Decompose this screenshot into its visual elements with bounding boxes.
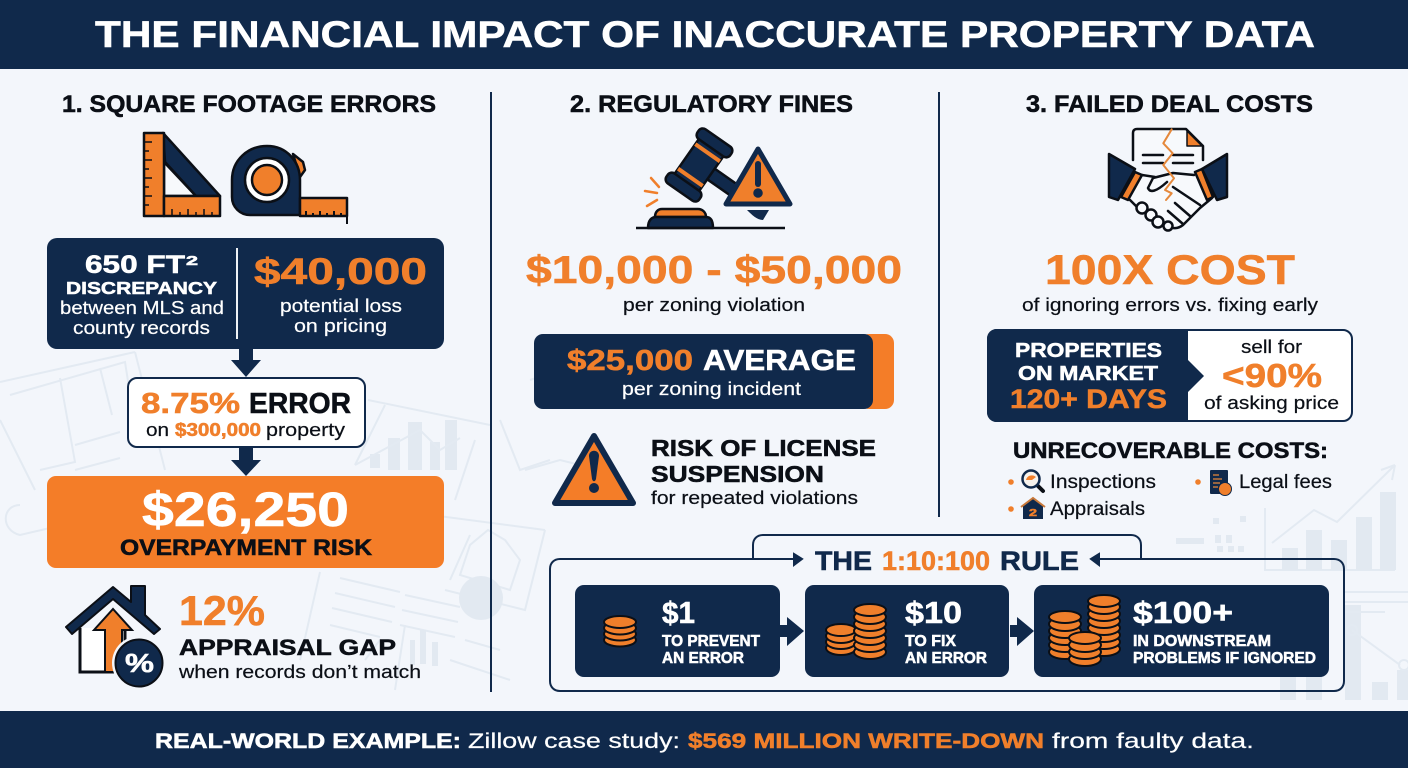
card: $100+ [1034,585,1329,677]
icon: coin stacks large [1049,595,1120,666]
stat: 100x cost [1022,246,1318,315]
stat: 100x cost: 100X COST [1045,246,1295,293]
callout: average fine: $25,000 [567,345,693,377]
heading: the 1:10:100 rule: THE [815,546,872,576]
text: license suspension risk [651,435,876,508]
list: unrecoverable costs: UNRECOVERABLE COSTS: [1013,438,1328,463]
icon: gavel and warning [636,126,790,228]
card: $1: AN ERROR [662,650,744,667]
card: $10 [805,585,1009,677]
panel: square footage errors [47,91,444,690]
callout: overpayment risk: $26,250 [142,484,349,537]
heading: the 1:10:100 rule: 1:10:100 [882,546,990,576]
callout: days on market: PROPERTIES [1015,340,1162,362]
card: $10: AN ERROR [905,650,987,667]
callout: error percentage: ERROR [249,388,351,420]
callout: average fine [534,334,894,409]
card: $1 [575,585,780,677]
card: $100+: IN DOWNSTREAM [1133,633,1271,650]
icon: appraisal house: 2 [1029,508,1038,519]
list: unrecoverable costs: Inspections [1050,472,1156,493]
stat: appraisal gap: when records don’t match [178,661,421,682]
callout: discrepancy and potential loss: county records [73,318,210,338]
icon: appraisal house [1021,498,1045,519]
callout: error percentage: 8.75% [141,388,240,420]
icon: set square and tape measure [144,133,347,224]
stat: appraisal gap: APPRAISAL GAP [179,635,396,660]
card: $1: $1 [662,595,695,630]
stat: fine range: per zoning violation [623,295,805,315]
title banner: THE FINANCIAL IMPACT OF INACCURATE PROPERTY DATA [95,14,1315,55]
footer: real-world example: Zillow case study: [468,730,680,753]
panel: failed deal costs [987,91,1352,520]
icon: legal document [1210,470,1232,496]
card: $100+: PROBLEMS IF IGNORED [1133,650,1316,667]
callout: discrepancy and potential loss: potential loss [280,296,402,316]
card: $10: TO FIX [905,633,957,650]
callout: average fine: AVERAGE [703,345,856,377]
callout: days on market: ON MARKET [1018,363,1158,385]
icon: warning triangle [555,436,633,503]
arrow: down to error [231,349,261,377]
footer: real-world example: from faulty data. [1052,730,1254,753]
stat: fine range: $10,000 - $50,000 [526,249,902,292]
callout: discrepancy and potential loss: 650 FT [85,251,185,279]
footer: real-world example: REAL-WORLD EXAMPLE: [155,730,461,753]
stat: appraisal gap: 12% [179,587,265,634]
icon: house with arrow and percent [66,586,166,690]
stat: appraisal gap [178,587,421,682]
stat: 100x cost: of ignoring errors vs. fixing early [1022,295,1318,315]
card: $1: TO PREVENT [662,633,761,650]
callout: error percentage: property [266,420,345,440]
panel: the 1:10:100 rule [550,535,1344,691]
callout: days on market: sell for [1241,337,1302,357]
card: $10: $10 [905,595,962,630]
footer: real-world example: $569 MILLION WRITE-DOWN [688,730,1044,753]
stat: fine range [526,249,902,315]
heading: the 1:10:100 rule: RULE [1000,546,1079,576]
callout: discrepancy and potential loss: on pricing [294,316,387,336]
callout: discrepancy and potential loss: $40,000 [254,251,427,292]
callout: days on market [987,329,1352,422]
text: license suspension risk: SUSPENSION [651,461,824,487]
column dividers [490,92,940,692]
icon: house with arrow and percent: % [125,648,154,678]
callout: days on market: <90% [1222,357,1322,394]
callout: error percentage [128,378,365,447]
callout: discrepancy and potential loss: 2 [186,253,198,268]
panel: regulatory fines [526,91,902,508]
callout: days on market: of asking price [1204,393,1339,413]
text: license suspension risk: for repeated violations [651,487,858,508]
callout: overpayment risk: OVERPAYMENT RISK [120,535,372,560]
callout: overpayment risk [47,476,444,568]
callout: error percentage: on [146,420,169,440]
callout: error percentage: $300,000 [175,420,261,440]
icon: magnifier [1022,470,1043,491]
arrow: $10 to $100 [1010,617,1034,646]
heading: square footage errors: 1. SQUARE FOOTAGE ERRORS [62,91,436,118]
icon: coin stack small [604,616,636,646]
footer: real-world example [0,711,1408,768]
frame with arrows [550,535,1344,691]
title banner [0,0,1408,69]
list: unrecoverable costs: Legal fees [1239,472,1332,493]
list: unrecoverable costs [1008,438,1332,520]
arrow: $1 to $10 [780,617,804,646]
heading: the 1:10:100 rule [815,546,1079,576]
icon: coin stacks medium [826,604,886,659]
callout: days on market: 120+ DAYS [1010,384,1167,414]
arrow: down to overpayment [231,447,261,476]
text: license suspension risk: RISK OF LICENSE [651,435,876,461]
callout: discrepancy and potential loss: DISCREPANCY [66,278,217,298]
background: faint property document sketches [0,352,1408,700]
callout: average fine: per zoning incident [622,379,801,399]
list: unrecoverable costs: Appraisals [1050,499,1145,520]
icon: torn contract and handshake [1109,129,1227,230]
card: $100+: $100+ [1133,595,1233,630]
heading: regulatory fines: 2. REGULATORY FINES [570,91,853,118]
callout: discrepancy and potential loss [47,238,444,349]
callout: discrepancy and potential loss: between MLS and [60,298,224,318]
heading: failed deal costs: 3. FAILED DEAL COSTS [1026,91,1313,118]
